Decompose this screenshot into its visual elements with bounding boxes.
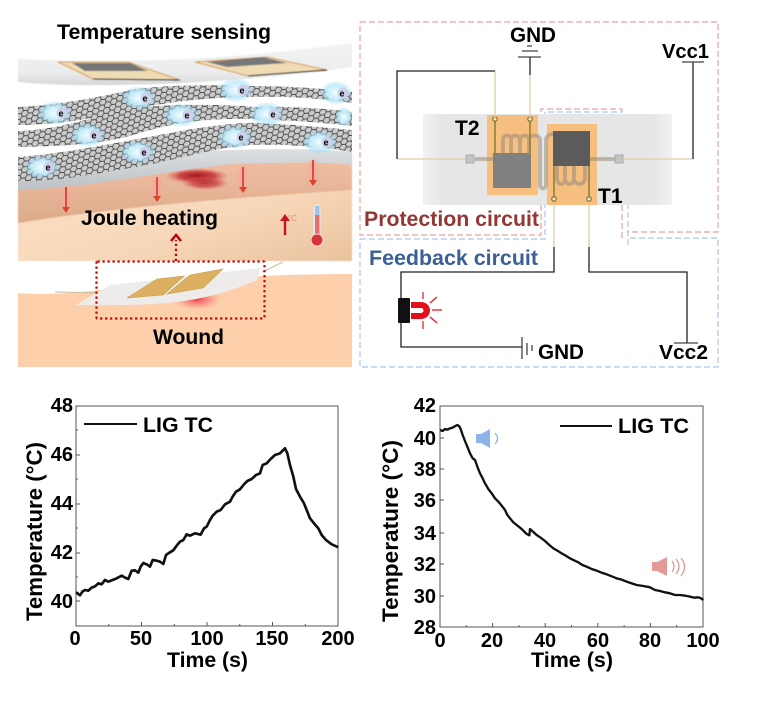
electron 9 xyxy=(217,125,253,149)
x axis title: Time (s) xyxy=(531,649,613,672)
x axis title: Time (s) xyxy=(167,649,248,672)
sensor pad left xyxy=(58,62,180,80)
icon: loud speaker xyxy=(652,557,684,576)
label: Vcc1: Vcc1 xyxy=(662,41,709,63)
protection circuit wires xyxy=(397,57,693,347)
skin with wound below xyxy=(18,274,352,367)
y tick labels: 30 xyxy=(414,586,436,608)
y tick labels: 32 xyxy=(414,554,436,576)
wound in tissue xyxy=(165,168,229,190)
panel: temperature sensing illustration xyxy=(18,43,353,367)
y tick labels: 42 xyxy=(414,395,436,417)
y tick labels xyxy=(414,395,437,639)
feedback circuit dashed outline xyxy=(360,112,718,367)
axes frame and ticks xyxy=(440,406,703,627)
y tick labels: 40 xyxy=(414,428,436,450)
electron 2 xyxy=(121,86,157,110)
label: GND top: GND xyxy=(510,24,556,47)
temperature up arrow xyxy=(280,214,297,235)
x tick labels: 50 xyxy=(130,628,152,650)
data line xyxy=(440,425,703,600)
legend xyxy=(84,414,213,437)
sensor pad right xyxy=(195,57,327,76)
x tick labels: 100 xyxy=(190,628,224,650)
upper film with sensors xyxy=(18,43,352,85)
label: T2: T2 xyxy=(455,117,480,140)
electron 10: e xyxy=(323,138,329,148)
y tick labels: 38 xyxy=(414,459,436,481)
icon: alarm buzzer xyxy=(398,292,442,329)
label: GND bottom: GND xyxy=(538,341,584,364)
protection circuit dashed outline xyxy=(360,22,718,238)
x tick labels: 200 xyxy=(321,628,355,650)
label: Wound: Wound xyxy=(153,326,224,349)
lower polymer film xyxy=(18,149,352,190)
legend xyxy=(560,415,689,438)
dotted arrow to zoomed view xyxy=(171,235,181,261)
dotted zoom box xyxy=(96,262,264,318)
electron 6: e xyxy=(270,110,276,120)
wound glow under device xyxy=(173,288,221,310)
ground symbol bottom xyxy=(522,337,532,359)
x tick labels: 80 xyxy=(639,630,661,652)
Vcc1 bar xyxy=(682,61,704,63)
x tick labels: 60 xyxy=(587,630,609,652)
graphene ribbon 3 xyxy=(18,123,352,181)
y tick labels: 34 xyxy=(414,523,437,545)
sensor square T2 xyxy=(493,153,531,188)
x tick labels: 0 xyxy=(434,630,446,652)
x tick labels: 0 xyxy=(69,628,81,650)
axes frame and ticks xyxy=(76,406,338,626)
graphene ribbon 1 xyxy=(18,85,352,125)
electron 10 xyxy=(302,130,338,154)
heading: Temperature sensing: Temperature sensing xyxy=(57,21,271,44)
sensor square T1 xyxy=(553,131,590,166)
icon: thermometer xyxy=(311,205,323,246)
y tick labels: 44 xyxy=(51,493,74,515)
olive traces xyxy=(495,119,589,199)
y axis title: Temperature (°C) xyxy=(378,440,403,622)
electrode T1 xyxy=(547,124,597,205)
label: Feedback circuit: Feedback circuit xyxy=(369,247,538,270)
label: Protection circuit: Protection circuit xyxy=(364,208,539,231)
label: Joule heating: Joule heating xyxy=(81,207,218,230)
chart: cooling curve xyxy=(378,395,720,672)
electron 9: e xyxy=(238,132,244,142)
electrode T2 xyxy=(487,115,538,195)
x tick labels: 20 xyxy=(481,630,503,652)
electron 6 xyxy=(249,102,285,126)
electron 12 xyxy=(24,155,60,179)
temperature up arrow: °C xyxy=(288,214,297,223)
gray substrate xyxy=(423,114,672,205)
legend: LIG TC xyxy=(618,415,689,438)
ground symbol top xyxy=(518,46,541,57)
electron 12: e xyxy=(45,162,51,172)
electron 5: e xyxy=(184,110,190,120)
label: T1: T1 xyxy=(598,185,623,208)
wearable device on skin xyxy=(55,262,283,305)
electron 7 xyxy=(335,107,353,127)
electron 1 xyxy=(37,101,73,125)
y tick labels: 42 xyxy=(51,542,73,564)
icon: quiet speaker xyxy=(476,429,498,448)
electron 4 xyxy=(320,81,352,105)
electron 5 xyxy=(163,103,199,127)
x tick labels: 100 xyxy=(686,630,720,652)
electron 8: e xyxy=(91,130,97,140)
y tick labels: 46 xyxy=(51,444,73,466)
graphene ribbon 2 xyxy=(18,105,352,147)
x tick labels: 150 xyxy=(255,628,289,650)
y tick labels: 40 xyxy=(51,591,73,613)
data line xyxy=(76,448,338,595)
serpentine heater trace xyxy=(475,134,615,188)
y tick labels: 28 xyxy=(414,617,436,639)
y tick labels xyxy=(51,395,74,613)
electron 3 xyxy=(218,78,254,102)
electron 11 xyxy=(120,140,156,164)
y tick labels: 36 xyxy=(414,490,436,512)
electron 3: e xyxy=(239,86,245,96)
electron 1: e xyxy=(58,108,64,118)
x tick labels xyxy=(434,630,720,652)
contact pads xyxy=(466,155,623,163)
electron 8 xyxy=(70,123,106,147)
y tick labels: 48 xyxy=(51,395,73,417)
electron 2: e xyxy=(142,94,148,104)
heat arrows xyxy=(62,160,317,213)
skin tissue block xyxy=(18,150,352,261)
label: Vcc2: Vcc2 xyxy=(659,342,708,364)
Vcc2 bar xyxy=(674,342,698,344)
terminal pads xyxy=(493,117,591,201)
legend: LIG TC xyxy=(143,414,213,437)
electron 4: e xyxy=(339,88,345,98)
y axis title: Temperature (°C) xyxy=(22,442,47,621)
chart: heating curve xyxy=(22,395,355,672)
panel: circuit diagram xyxy=(360,22,718,367)
electron 11: e xyxy=(141,148,147,158)
x tick labels xyxy=(69,628,355,650)
x tick labels: 40 xyxy=(534,630,556,652)
